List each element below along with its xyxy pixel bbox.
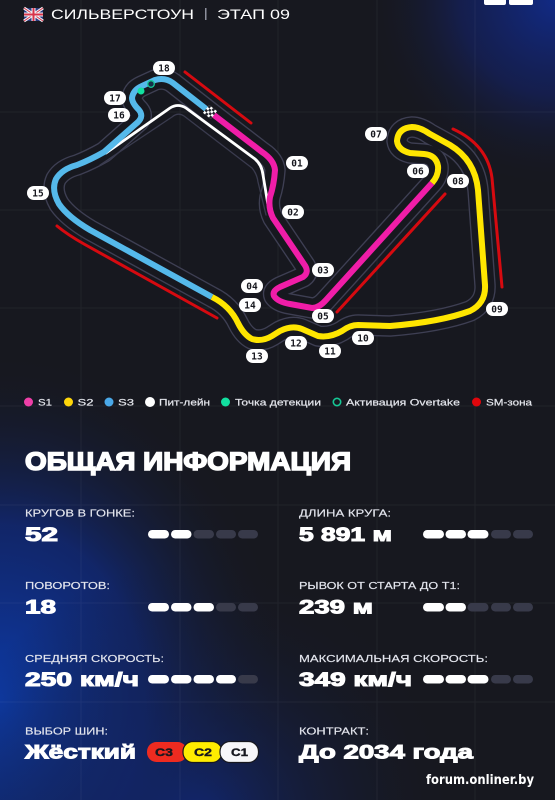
stat: turns: ПОВОРОТОВ: <box>25 581 110 592</box>
turn labels: 10 <box>357 334 369 344</box>
stat: contract <box>299 726 474 764</box>
legend: S2 <box>78 398 94 408</box>
stat: laps: 52 <box>25 525 58 546</box>
tyre compound pills: C2 <box>194 747 212 759</box>
stat: top speed: МАКСИМАЛЬНАЯ СКОРОСТЬ: <box>299 654 488 665</box>
legend: S1 <box>38 398 52 408</box>
sector 3 <box>54 79 212 297</box>
legend: Пит-лейн <box>159 398 210 408</box>
circuit name: СИЛЬВЕРСТОУН <box>51 6 194 22</box>
turn labels: 08 <box>452 176 464 188</box>
turn labels: 03 <box>317 266 329 276</box>
stat: average speed: 250 км/ч <box>25 670 139 691</box>
stat: average speed: СРЕДНЯЯ СКОРОСТЬ: <box>25 654 164 665</box>
round number: ЭТАП 09 <box>217 6 290 22</box>
icon: UK flag <box>24 8 43 21</box>
stat: top speed <box>299 654 533 691</box>
turn labels: 16 <box>113 110 125 122</box>
legend: SM-зона <box>486 398 533 408</box>
overtake activation <box>148 81 154 87</box>
top-right cut-off white tabs <box>484 0 533 5</box>
turn labels: 12 <box>290 338 302 350</box>
turn labels: 13 <box>251 352 263 362</box>
tyre compound pills: C3 <box>155 747 173 759</box>
legend: Точка детекции <box>235 398 321 408</box>
turn labels: 17 <box>109 94 121 104</box>
stat: average speed <box>25 654 258 691</box>
pit lane <box>106 106 268 205</box>
stat: laps <box>25 508 258 546</box>
turn labels: 14 <box>244 300 256 312</box>
turn labels: 02 <box>287 208 299 218</box>
heading: general information: ОБЩАЯ ИНФОРМАЦИЯ <box>25 448 351 476</box>
turn labels: 04 <box>246 282 258 292</box>
tyre compound pills: C1 <box>231 747 248 759</box>
sector 2 <box>212 127 485 340</box>
turn labels: 18 <box>158 64 170 74</box>
stat: start to T1 <box>299 581 533 618</box>
stat: contract: До 2034 года <box>299 742 474 764</box>
stat: lap length <box>299 508 533 546</box>
stat: start to T1: РЫВОК ОТ СТАРТА ДО Т1: <box>299 581 460 592</box>
stat: tyre choice: ВЫБОР ШИН: <box>25 726 108 738</box>
stat: tyre choice: Жёсткий <box>24 742 136 764</box>
stat: tyre choice <box>24 726 258 764</box>
detection point <box>138 88 144 94</box>
track map <box>27 61 508 363</box>
turn labels: 06 <box>412 166 424 178</box>
stat: lap length: ДЛИНА КРУГА: <box>299 508 391 520</box>
legend <box>24 397 533 408</box>
separator <box>205 8 206 20</box>
turn labels <box>27 61 508 363</box>
turn labels: 07 <box>370 130 382 140</box>
stat: lap length: 5 891 м <box>299 525 392 546</box>
turn labels: 15 <box>32 188 44 200</box>
turn labels: 01 <box>291 158 303 170</box>
header: round name <box>24 6 290 22</box>
SM zones <box>57 72 502 318</box>
sector 1 <box>210 112 432 308</box>
stat: turns: 18 <box>25 598 56 618</box>
stat: laps: КРУГОВ В ГОНКЕ: <box>25 508 135 520</box>
turn labels: 09 <box>491 304 503 316</box>
turn labels: 05 <box>317 312 329 322</box>
legend: Активация Overtake <box>346 398 460 408</box>
tyre compound pills <box>147 742 258 762</box>
turn labels: 11 <box>324 346 336 358</box>
stat: turns <box>25 581 258 618</box>
stat: contract: КОНТРАКТ: <box>299 726 369 738</box>
watermark: forum.onliner.by <box>426 773 534 788</box>
stat: start to T1: 239 м <box>299 598 373 618</box>
track outline <box>54 79 485 340</box>
legend: S3 <box>118 398 134 408</box>
start/finish flag <box>203 105 217 119</box>
stat: top speed: 349 км/ч <box>299 670 412 691</box>
